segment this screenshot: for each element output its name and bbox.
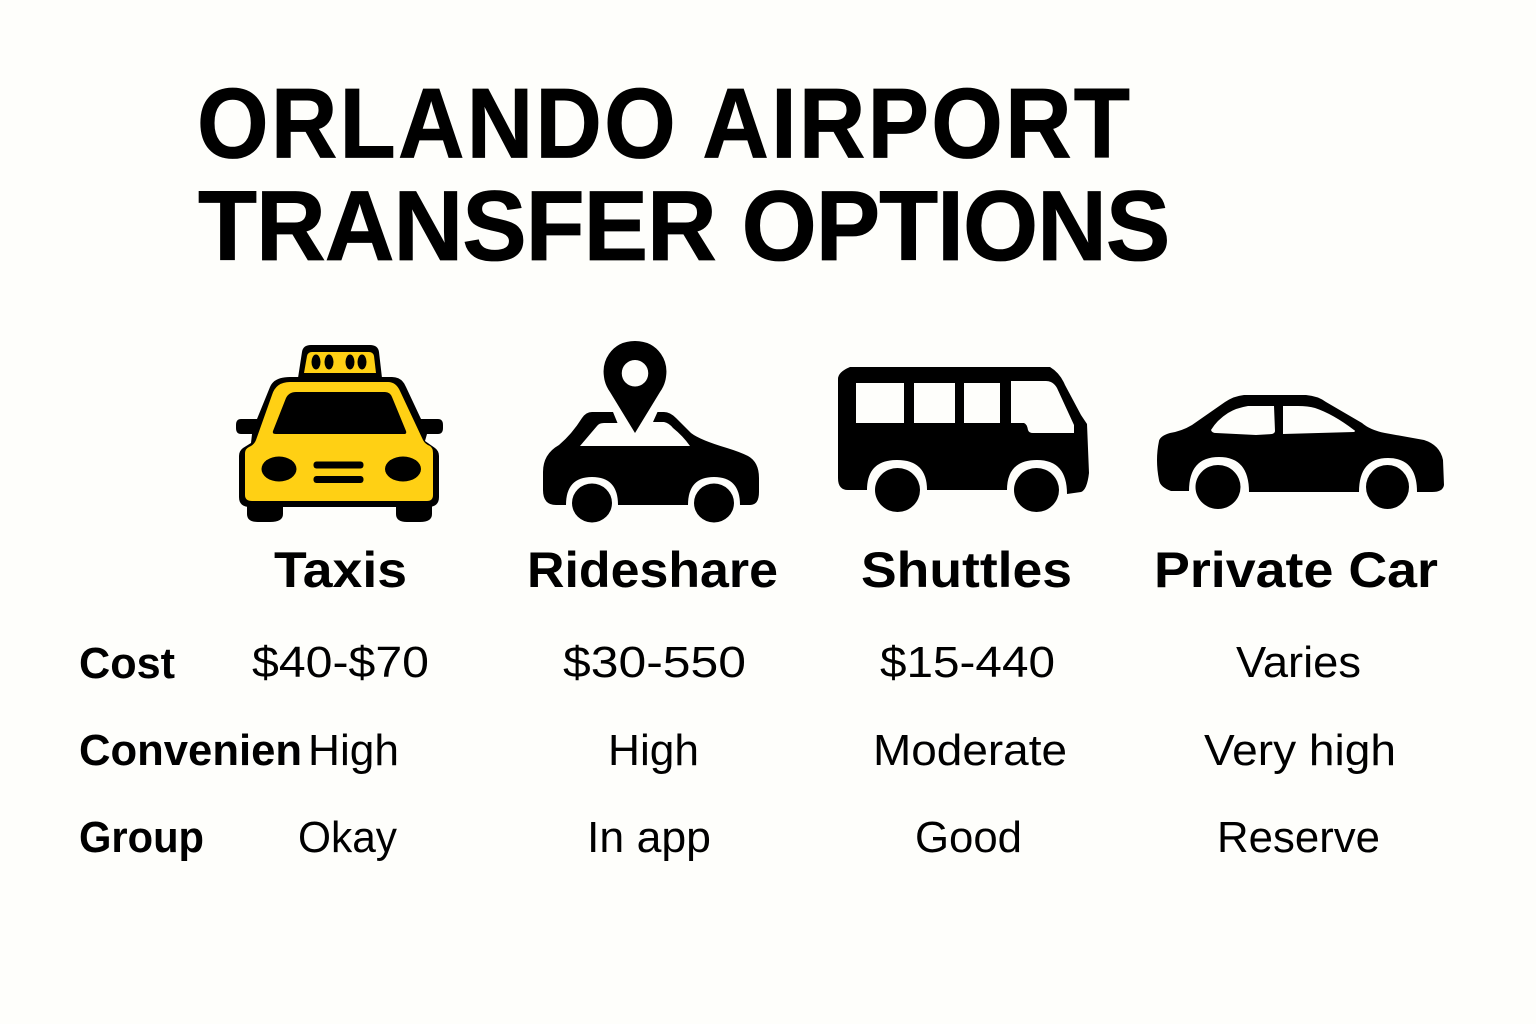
cost values — [252, 638, 1361, 687]
group values: Okay — [298, 813, 397, 862]
icon: rideshare car with location pin — [543, 341, 759, 522]
title: ORLANDO AIRPORT — [197, 68, 1130, 179]
heading: Shuttles: Shuttles — [861, 542, 1072, 598]
group values: Reserve — [1217, 813, 1380, 862]
title: TRANSFER OPTIONS — [198, 170, 1170, 281]
icon: taxi — [236, 345, 443, 522]
group values: Good — [915, 813, 1022, 862]
title — [197, 68, 1170, 281]
row label: Cost: Cost — [79, 639, 175, 688]
group values — [298, 813, 1380, 862]
cost values: $30-550 — [563, 638, 746, 687]
icon: shuttle bus — [838, 367, 1089, 512]
cost values: $40-$70 — [252, 638, 429, 687]
convenience values: High — [308, 726, 399, 775]
icon: private car — [1157, 395, 1444, 509]
heading: Rideshare: Rideshare — [527, 542, 778, 598]
cost values: Varies — [1236, 638, 1361, 687]
heading: Private Car: Private Car — [1154, 542, 1438, 598]
convenience values: Very high — [1204, 726, 1396, 775]
convenience values: High — [608, 726, 699, 775]
convenience values: Moderate — [873, 726, 1067, 775]
heading: Taxis: Taxis — [274, 542, 407, 598]
group values: In app — [587, 813, 711, 862]
cost values: $15-440 — [880, 638, 1055, 687]
row label: Convenience: Convenien — [79, 726, 302, 775]
row label: Group: Group — [79, 813, 204, 862]
convenience values — [308, 726, 1396, 775]
